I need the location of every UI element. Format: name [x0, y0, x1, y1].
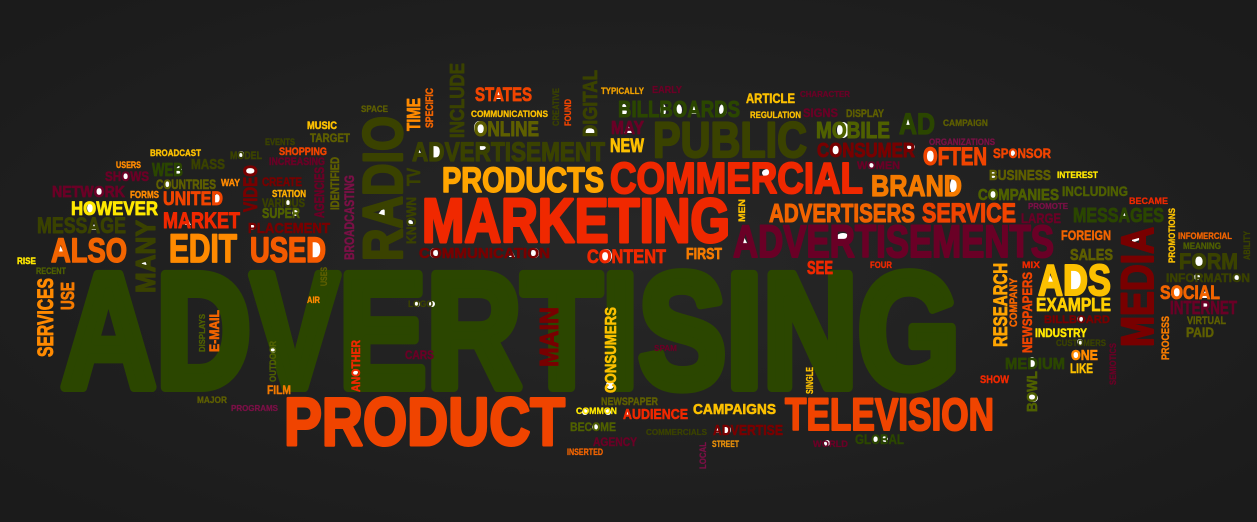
left cluster words: VIDEO: [241, 165, 262, 212]
right cluster words: EXAMPLE: [1036, 295, 1111, 315]
centre cluster words: EARLY: [652, 85, 682, 96]
right cluster words: SALES: [1070, 247, 1113, 264]
right cluster words: BECAME: [1129, 196, 1168, 207]
left cluster words: INCREASING: [269, 156, 325, 168]
major words: RADIO: [351, 116, 414, 261]
centre cluster words: INSERTED: [567, 447, 603, 457]
major words: AD: [899, 108, 935, 141]
left cluster words: BROADCAST: [150, 148, 201, 159]
right cluster words: SEMIOTICS: [1108, 343, 1119, 385]
centre cluster words: SINGLE: [805, 367, 816, 394]
right cluster words: INFORMATION: [1166, 271, 1250, 285]
major words: ALSO: [51, 232, 127, 270]
left cluster words: HOWEVER: [71, 199, 158, 220]
major words: MEDIA: [1112, 227, 1163, 347]
right cluster words: SHOW: [980, 374, 1010, 386]
centre cluster words: SPAM: [654, 344, 677, 353]
left cluster words: MAJOR: [197, 395, 227, 406]
major words: SEE: [807, 258, 833, 278]
right cluster words: INTEREST: [1057, 170, 1098, 181]
left cluster words: MESSAGE: [37, 213, 126, 238]
left cluster words: DISPLAYS: [198, 313, 207, 352]
centre cluster words: TV: [404, 168, 424, 186]
right cluster words: PROMOTE: [1028, 201, 1068, 211]
centre cluster words: CREATIVE: [551, 88, 562, 126]
right cluster words: MIX: [1022, 260, 1041, 271]
major words: EDIT: [169, 227, 237, 271]
right cluster words: COMPANY: [1008, 277, 1020, 327]
major words: BRAND: [871, 170, 962, 203]
centre cluster words: MEN: [737, 199, 748, 222]
left cluster words: MANY: [130, 220, 161, 293]
right cluster words: SOCIAL: [1160, 283, 1220, 304]
right cluster words: RESEARCH: [991, 263, 1012, 347]
white letter counters: [55, 91, 1240, 446]
centre cluster words: DIGITAL: [580, 70, 602, 137]
centre cluster words: STREET: [712, 439, 739, 450]
left cluster words: NETWORK: [52, 184, 125, 201]
right cluster words: [746, 89, 1253, 412]
right cluster words: INDUSTRY: [1035, 326, 1087, 340]
main word: advertising: ADVERTISING: [61, 239, 960, 422]
centre cluster words: CAMPAIGNS: [693, 401, 776, 418]
centre cluster words: TIME: [404, 98, 424, 131]
centre cluster words: NEWSPAPER: [601, 396, 658, 408]
left cluster words: [17, 104, 434, 413]
left cluster words: RISE: [17, 256, 36, 267]
right cluster words: NEWSPAPERS: [1019, 272, 1035, 353]
right cluster words: INCLUDING: [1062, 183, 1128, 199]
centre cluster words: FOUND: [563, 99, 574, 126]
left cluster words: WAY: [221, 178, 240, 189]
centre cluster words: KNOWN: [403, 197, 419, 244]
left cluster words: PLACEMENT: [248, 220, 330, 237]
right cluster words: SPONSOR: [993, 146, 1051, 161]
right cluster words: PROCESS: [1160, 316, 1172, 360]
left cluster words: UNITED: [163, 189, 223, 210]
left cluster words: USES: [319, 267, 330, 286]
right cluster words: PAID: [1186, 324, 1214, 340]
major words: PUBLIC: [653, 112, 807, 168]
major words: SERVICE: [922, 198, 1016, 228]
right cluster words: INFOMERCIAL: [1178, 231, 1232, 242]
centre cluster words: CONSUMERS: [603, 307, 620, 393]
centre cluster words: AUDIENCE: [623, 406, 688, 423]
left cluster words: MODEL: [230, 150, 262, 162]
centre cluster words: AGENCY: [593, 435, 637, 449]
major words: ADVERTISEMENT: [412, 137, 605, 167]
centre cluster words: LOCAL: [698, 442, 709, 469]
centre cluster words: BECOME: [570, 420, 616, 434]
centre cluster words: WORLD: [813, 439, 848, 450]
left cluster words: SERVICES: [33, 278, 58, 357]
right cluster words: SIGNS: [803, 106, 838, 120]
left cluster words: MASS: [191, 156, 225, 173]
left cluster words: MUSIC: [307, 120, 337, 132]
major words: ADVERTISERS: [769, 198, 915, 228]
major words: PRODUCTS: [442, 161, 604, 200]
centre cluster words: TYPICALLY: [601, 86, 645, 97]
left cluster words: BROADCASTING: [341, 175, 357, 260]
right cluster words: VIRTUAL: [1187, 315, 1226, 327]
left cluster words: CREATE: [262, 175, 302, 189]
left cluster words: SHOPPING: [279, 146, 327, 158]
left cluster words: ANOTHER: [349, 340, 363, 392]
centre cluster words: INCLUDE: [447, 63, 469, 138]
right cluster words: COMPANIES: [978, 187, 1059, 204]
right cluster words: BUSINESS: [989, 167, 1051, 184]
major words: MAY: [611, 118, 644, 138]
major words: COMMUNICATION: [419, 245, 550, 262]
major words: MARKETING: [422, 187, 730, 256]
right cluster words: CAMPAIGN: [943, 118, 988, 129]
major words: FIRST: [686, 246, 722, 263]
right cluster words: DISPLAY: [846, 108, 885, 120]
right cluster words: ORGANIZATIONS: [929, 137, 995, 148]
right cluster words: BILLBOARD: [1044, 314, 1110, 326]
right cluster words: MEANING: [1183, 241, 1221, 252]
centre cluster words: SPECIFIC: [424, 88, 436, 128]
left cluster words: AIR: [307, 295, 320, 305]
right cluster words: LIKE: [1070, 360, 1093, 376]
centre cluster words: COMMUNICATIONS: [471, 109, 548, 120]
centre cluster words: COMMON: [576, 406, 617, 417]
major words: NEW: [610, 136, 644, 157]
left cluster words: RECENT: [36, 266, 66, 276]
left cluster words: COUNTRIES: [156, 176, 216, 192]
major words: ADS: [1038, 256, 1111, 305]
left cluster words: FORMS: [130, 190, 159, 201]
left cluster words: OUTDOOR: [268, 341, 279, 382]
major words: ADVERTISEMENTS: [733, 216, 1054, 267]
right cluster words: FORM: [1179, 249, 1238, 274]
left cluster words: LOGO: [408, 299, 433, 309]
left cluster words: MARKET: [163, 208, 240, 233]
right cluster words: FOREIGN: [1061, 227, 1111, 243]
right cluster words: BOWL: [1024, 371, 1041, 412]
left cluster words: AGENCIES: [311, 167, 327, 218]
major words: MESSAGES: [1073, 205, 1164, 227]
left cluster words: EVENTS: [265, 137, 295, 148]
left cluster words: SPACE: [361, 104, 388, 114]
left cluster words: CARS: [405, 348, 434, 362]
left cluster words: SUPER: [262, 205, 300, 222]
major words: OFTEN: [923, 143, 987, 171]
major words: ONLINE: [474, 118, 539, 141]
left cluster words: STATION: [272, 189, 306, 200]
major words: USED: [250, 231, 326, 270]
left cluster words: VARIOUS: [262, 196, 305, 210]
major words: CONTENT: [587, 247, 666, 268]
centre cluster words: MAIN: [534, 307, 564, 367]
left cluster words: IDENTIFIED: [328, 157, 342, 210]
right cluster words: ARTICLE: [746, 91, 795, 106]
major words: TELEVISION: [785, 389, 994, 440]
right cluster words: ABILITY: [1242, 230, 1253, 260]
word cloud: [17, 63, 1253, 469]
left cluster words: SHOWS: [105, 168, 149, 184]
left cluster words: E-MAIL: [206, 310, 222, 352]
right cluster words: MEDIUM: [1005, 356, 1065, 373]
left cluster words: USE: [58, 282, 78, 310]
major words: BILLBOARDS: [618, 96, 740, 122]
right cluster words: REGULATION: [750, 110, 801, 121]
centre cluster words: ADVERTISE: [713, 422, 783, 439]
major words: PRODUCT: [284, 384, 565, 460]
left cluster words: FILM: [267, 383, 291, 397]
centre cluster words: [403, 63, 904, 469]
centre cluster words: COMMERCIALS: [646, 427, 707, 437]
major words: COMMERCIAL: [610, 154, 863, 203]
right cluster words: FOUR: [870, 260, 892, 271]
right cluster words: LARGE: [1021, 210, 1061, 226]
right cluster words: ONE: [1071, 347, 1098, 364]
major words: [51, 85, 1164, 460]
left cluster words: USERS: [116, 160, 141, 171]
right cluster words: CUSTOMERS: [1056, 338, 1106, 349]
left cluster words: WEB: [152, 160, 183, 180]
major words: CONSUMER: [817, 140, 915, 162]
major words: STATES: [475, 85, 532, 106]
right cluster words: CHARACTER: [800, 89, 850, 99]
left cluster words: PROGRAMS: [231, 403, 278, 413]
major words: MOBILE: [816, 117, 890, 143]
centre cluster words: GLOBAL: [855, 431, 904, 447]
right cluster words: PROMOTIONS: [1167, 208, 1178, 263]
left cluster words: TARGET: [310, 131, 351, 145]
right cluster words: WOMEN: [857, 160, 900, 172]
